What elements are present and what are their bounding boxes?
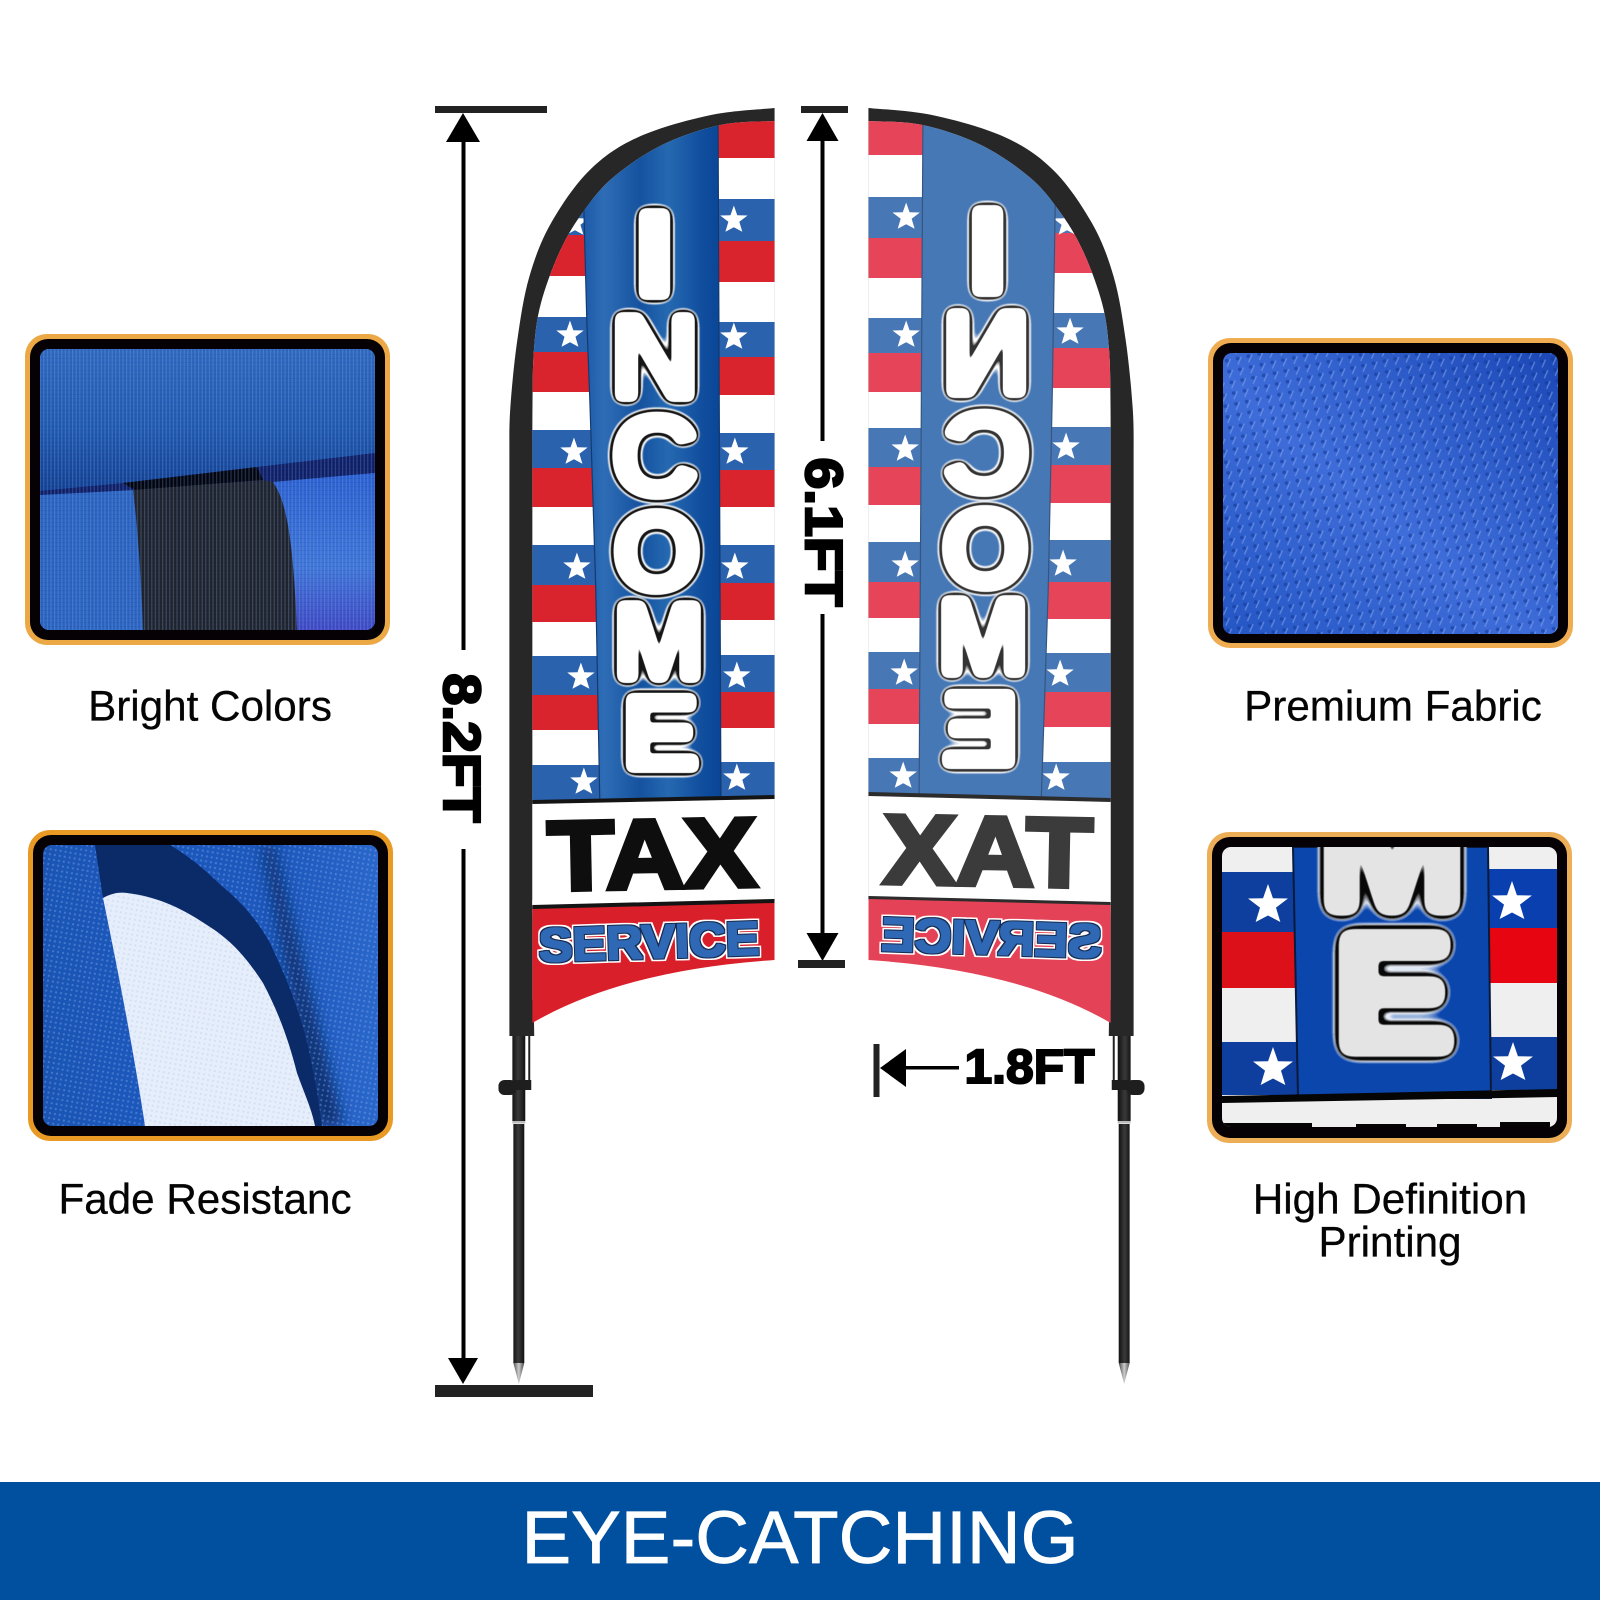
card: fade resistance — [28, 830, 393, 1141]
dimension: 6.1 ft banner height — [794, 106, 852, 968]
dimension: 8.2 ft overall height: 8.2FT — [432, 674, 490, 823]
fabric photo: premium fabric — [1223, 353, 1558, 634]
left flag black frame — [509, 108, 775, 1036]
dimension: 1.8 ft banner width — [874, 1041, 1094, 1097]
INCOME letter O: O — [613, 489, 701, 614]
label: high definition printing — [1253, 1176, 1527, 1266]
label: fade resistance: Fade Resistanc — [58, 1176, 352, 1222]
INCOME letter I mirrored: I — [965, 182, 1011, 319]
card: high definition printing — [1207, 832, 1572, 1143]
right flag black frame — [868, 108, 1134, 1036]
letter M close-up: M — [1319, 751, 1465, 947]
fabric photo: bright colors — [40, 349, 375, 630]
card frame — [28, 830, 393, 1141]
red bottom band — [868, 899, 1111, 1030]
label: high definition printing: High Definition — [1253, 1176, 1527, 1222]
card frame — [1208, 338, 1573, 648]
dimension: 8.2 ft overall height — [432, 106, 593, 1397]
stars on right flag — [889, 202, 1084, 790]
TAX word: TAX — [547, 798, 757, 911]
fabric photo: fade resistance — [43, 845, 378, 1126]
card frame — [25, 334, 390, 645]
INCOME letter M: M — [613, 581, 704, 703]
INCOME letter N: N — [610, 290, 699, 424]
center blue column — [919, 100, 1056, 800]
INCOME letter M mirrored: M — [938, 576, 1029, 698]
center blue column — [582, 100, 721, 800]
left flag fabric — [532, 100, 775, 1030]
label: bright colors: Bright Colors — [88, 682, 332, 730]
card frame — [1207, 832, 1572, 1143]
white TAX band — [532, 800, 722, 906]
label: premium fabric: Premium Fabric — [1244, 682, 1542, 730]
dimension: 1.8 ft banner width: 1.8FT — [964, 1041, 1094, 1094]
dimension: 6.1 ft banner height: 6.1FT — [794, 458, 852, 607]
card: premium fabric — [1208, 338, 1573, 648]
card: bright colors — [25, 334, 390, 645]
TAX word mirrored: TAX — [883, 795, 1093, 908]
right flag fabric — [868, 100, 1111, 1030]
INCOME letter O mirrored: O — [941, 486, 1029, 611]
SERVICE word: SERVICE — [538, 912, 760, 972]
flag close-up photo — [1222, 847, 1557, 1127]
INCOME letter I: I — [631, 185, 677, 322]
INCOME letter N mirrored: N — [942, 286, 1031, 420]
INCOME letter C mirrored: C — [943, 390, 1030, 516]
stars on left flag — [556, 206, 751, 794]
INCOME letter E: E — [622, 674, 700, 792]
left flag pole — [498, 1036, 531, 1384]
red bottom band — [532, 903, 775, 1030]
white TAX band — [918, 797, 1111, 903]
footer banner — [0, 1482, 1600, 1600]
SERVICE word mirrored: SERVICE — [880, 908, 1103, 968]
right flag (mirrored print) — [868, 100, 1145, 1384]
footer heading: EYE-CATCHING — [522, 1496, 1078, 1579]
letter E close-up: E — [1333, 899, 1455, 1085]
INCOME letter E mirrored: E — [941, 670, 1019, 788]
label: high definition printing: Printing — [1318, 1218, 1462, 1266]
INCOME letter C: C — [611, 393, 699, 519]
right flag pole — [1112, 1036, 1145, 1384]
left flag — [498, 100, 775, 1384]
